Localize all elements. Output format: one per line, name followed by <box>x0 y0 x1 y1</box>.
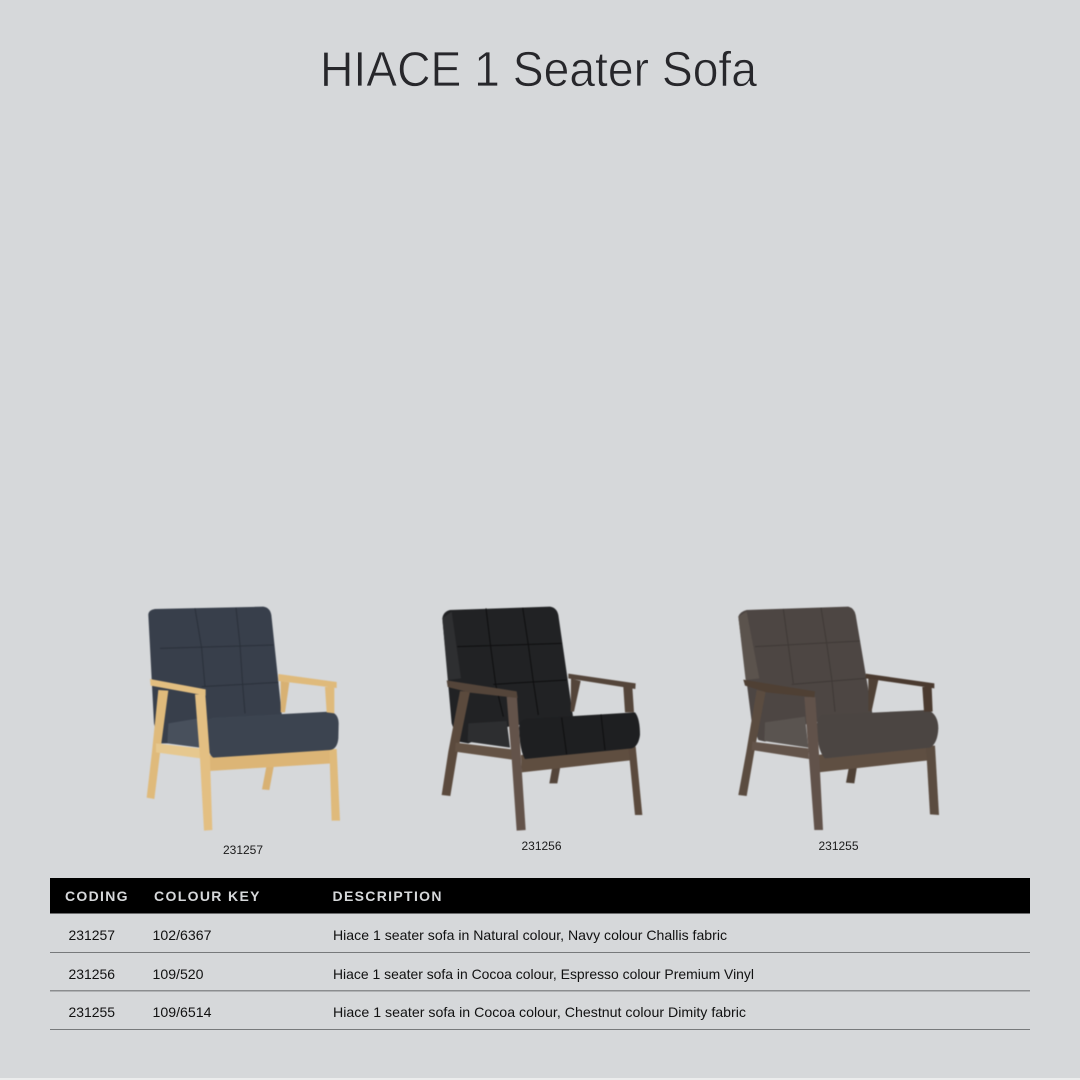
right rear leg <box>628 747 642 815</box>
table header: CODING <box>65 888 128 904</box>
side panel <box>738 612 759 680</box>
row 231256 <box>50 966 1030 992</box>
row 231257 <box>50 927 1030 953</box>
tufting <box>755 608 865 712</box>
left arm <box>150 679 206 696</box>
caption 231257: 231257 <box>223 843 263 857</box>
side rail <box>156 743 201 758</box>
side panel <box>442 612 461 680</box>
row 231256: 231256 <box>68 966 115 982</box>
seat cushion <box>519 712 640 759</box>
seat seams <box>562 714 605 754</box>
rear legs and inner post <box>846 678 878 783</box>
row 231256: 109/520 <box>152 966 204 982</box>
front rail <box>521 745 633 772</box>
table header <box>50 878 1030 914</box>
front post <box>804 697 823 830</box>
row 231255: 109/6514 <box>152 1004 212 1020</box>
chair back <box>148 607 282 743</box>
row 231255: Hiace 1 seater sofa in Cocoa colour, Chestnut colour Dimity fabric <box>333 1004 746 1020</box>
right rear leg <box>329 749 340 821</box>
right rear leg <box>926 746 939 815</box>
rear legs and inner post <box>262 681 289 790</box>
front post <box>507 697 526 831</box>
row 231257: Hiace 1 seater sofa in Natural colour, Navy colour Challis fabric <box>333 927 727 943</box>
left arm <box>447 680 518 698</box>
side rail <box>752 742 809 759</box>
side rail <box>455 743 512 760</box>
left arm <box>743 680 815 697</box>
table header: COLOUR KEY <box>154 888 260 904</box>
front rail <box>209 748 332 771</box>
left leg <box>738 690 766 796</box>
left leg <box>442 691 470 796</box>
seat cushion <box>207 712 339 758</box>
table <box>50 878 1030 1030</box>
tufting <box>457 608 567 717</box>
tufting <box>160 608 278 713</box>
row 231257: 231257 <box>68 927 115 943</box>
left leg <box>147 690 168 799</box>
caption 231256: 231256 <box>522 839 562 853</box>
chair: 231256 espresso vinyl, cocoa wood <box>442 607 642 831</box>
chair back <box>738 607 872 742</box>
inner seat <box>167 718 200 748</box>
rear legs and inner post <box>549 678 581 783</box>
front rail <box>817 743 932 772</box>
table header: DESCRIPTION <box>332 888 442 904</box>
title: HIACE 1 Seater Sofa <box>320 43 758 97</box>
chair: 231257 navy fabric, natural wood <box>147 607 340 831</box>
right arm <box>866 674 934 712</box>
inner seat <box>468 721 510 748</box>
right arm <box>568 674 636 712</box>
front post <box>195 694 212 831</box>
right arm <box>278 674 337 713</box>
seat cushion <box>817 710 938 758</box>
row 231255: 231255 <box>68 1004 115 1020</box>
chair back <box>442 607 573 743</box>
inner seat <box>764 717 808 748</box>
row 231256: Hiace 1 seater sofa in Cocoa colour, Espresso colour Premium Vinyl <box>333 966 754 982</box>
chair: 231255 chestnut fabric, cocoa wood <box>738 607 939 830</box>
caption 231255: 231255 <box>818 839 859 853</box>
row 231257: 102/6367 <box>152 927 212 943</box>
row 231255 <box>50 1004 1030 1030</box>
